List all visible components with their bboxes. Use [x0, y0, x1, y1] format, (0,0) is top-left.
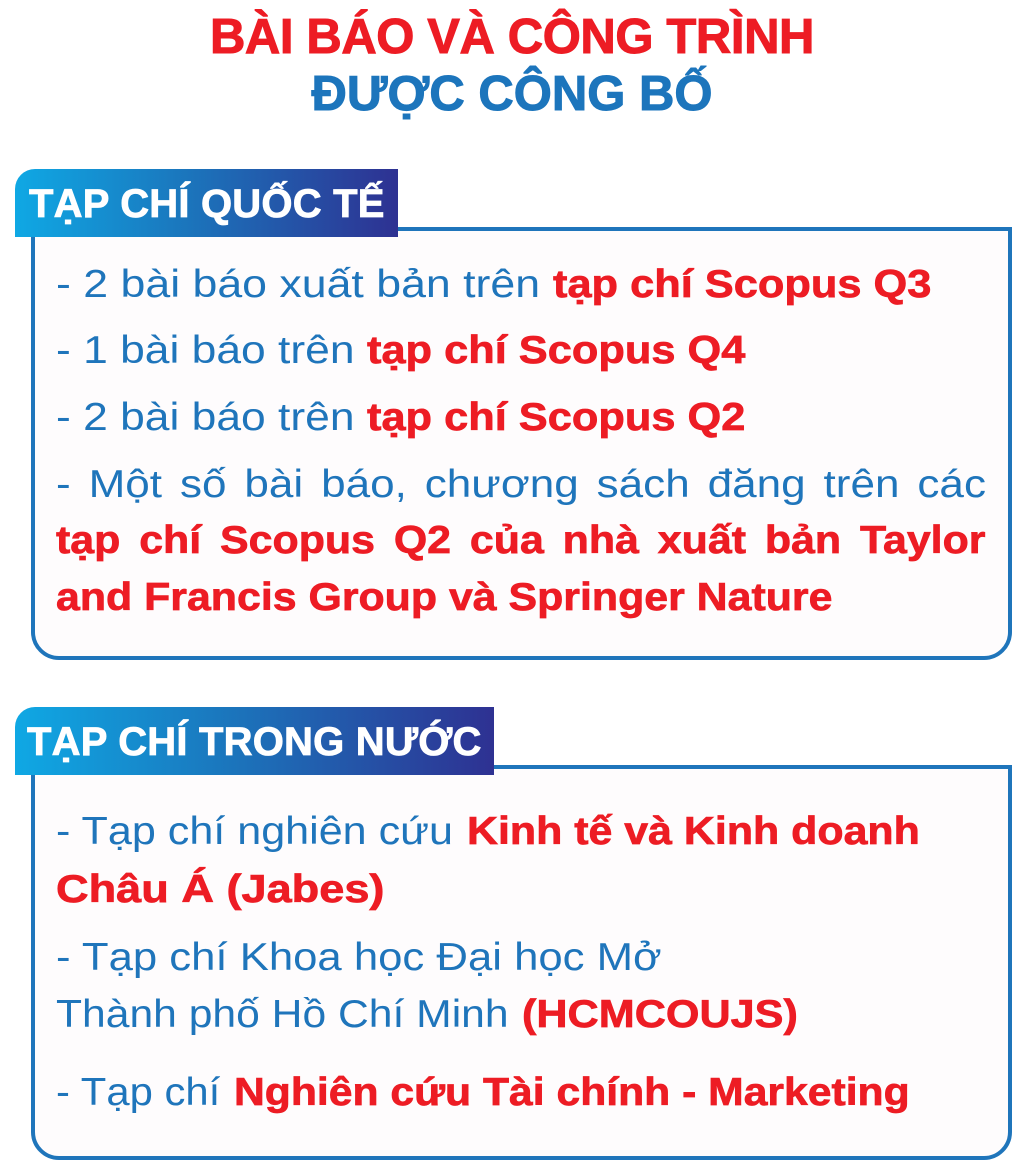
- panel: international journals: [31, 227, 1012, 660]
- text: HCMCOUJS: - Tạp chí Khoa học Đại học Mở: [56, 936, 662, 979]
- heading: domestic journals: [15, 707, 494, 775]
- title: BÀI BÁO VÀ CÔNG TRÌNH: [210, 10, 814, 64]
- text: Scopus Q4: - 1 bài báo trên: [56, 329, 355, 372]
- text: book chapters: - Một số bài báo, chương sách đăng trên các: [56, 463, 986, 506]
- text: Scopus Q4: [56, 329, 746, 372]
- heading: international journals: TẠP CHÍ QUỐC TẾ: [29, 182, 385, 226]
- text: Jabes: - Tạp chí nghiên cứu: [56, 810, 453, 853]
- text: Scopus Q3: tạp chí Scopus Q3: [553, 263, 931, 306]
- text: Scopus Q3: [56, 263, 931, 306]
- text: Jabes: Châu Á (Jabes): [56, 868, 384, 911]
- text: Jabes: Kinh tế và Kinh doanh: [467, 810, 920, 853]
- heading: domestic journals: TẠP CHÍ TRONG NƯỚC: [27, 720, 482, 764]
- text: Scopus Q2: - 2 bài báo trên: [56, 396, 355, 439]
- text: book chapters: [56, 463, 986, 619]
- text: HCMCOUJS: Thành phố Hồ Chí Minh: [56, 993, 509, 1036]
- text: Finance Marketing: - Tạp chí: [56, 1071, 220, 1114]
- text: Jabes: [56, 810, 920, 911]
- title: ĐƯỢC CÔNG BỐ: [312, 67, 712, 121]
- heading: international journals: [15, 169, 398, 237]
- text: book chapters: tạp chí Scopus Q2 của nhà xuất bản Taylor: [56, 519, 986, 562]
- text: Scopus Q4: tạp chí Scopus Q4: [367, 329, 745, 372]
- text: Finance Marketing: Nghiên cứu Tài chính - Marketing: [234, 1071, 910, 1114]
- panel: domestic journals: [31, 765, 1012, 1160]
- text: Scopus Q3: - 2 bài báo xuất bản trên: [56, 263, 540, 306]
- title: [210, 8, 814, 121]
- text: book chapters: and Francis Group và Springer Nature: [56, 576, 832, 619]
- text: HCMCOUJS: [56, 936, 798, 1036]
- text: HCMCOUJS: (HCMCOUJS): [522, 993, 798, 1036]
- text: Scopus Q2: [56, 396, 745, 439]
- text: Scopus Q2: tạp chí Scopus Q2: [367, 396, 745, 439]
